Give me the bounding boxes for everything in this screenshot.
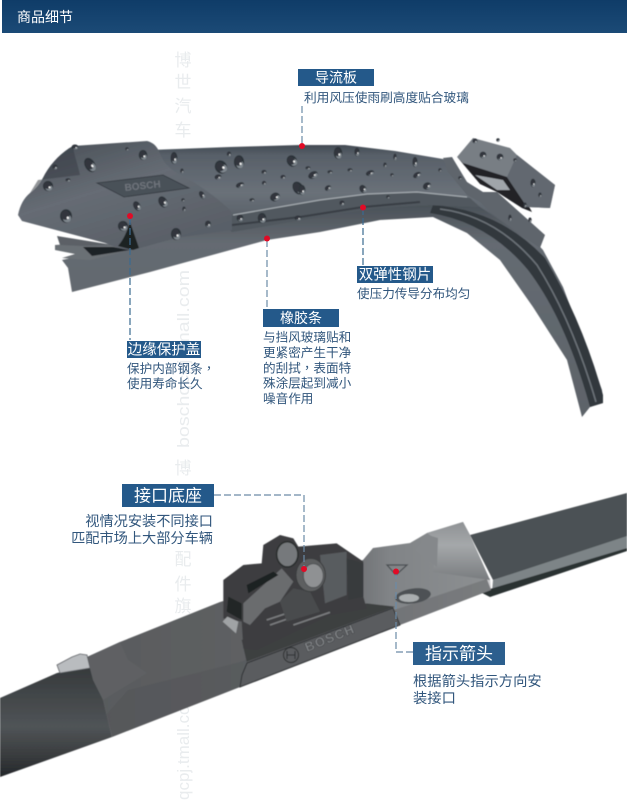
watermark [174, 51, 193, 800]
droplets [43, 138, 542, 240]
label: rubber strip [263, 309, 339, 327]
steel strip channel [232, 192, 480, 232]
end cap [18, 141, 232, 250]
text: connector description [71, 513, 213, 547]
central body [87, 522, 491, 737]
wiper blade with water droplets: BOSCH [124, 179, 161, 194]
text: indicator description [413, 672, 542, 707]
label: rubber strip: 橡胶条 [280, 310, 322, 326]
right fin [415, 535, 438, 567]
watermark: 店 [174, 643, 192, 662]
red dot: indicator arrow [393, 568, 413, 652]
watermark: 件 [174, 575, 192, 594]
text: deflector description: 利用风压使雨刷高度贴合玻璃 [304, 90, 469, 105]
base plate [240, 608, 400, 687]
blade with connector base [0, 493, 627, 777]
rubber strip [62, 200, 603, 417]
text: rubber description: 与挡风玻璃贴和 [263, 330, 351, 344]
wiper blade with water droplets [18, 138, 603, 417]
watermark: 车 [174, 121, 192, 140]
red dot: rubber strip [264, 236, 270, 309]
watermark: boschqcpj.tmall.com [174, 270, 193, 448]
red dot: deflector [299, 106, 305, 149]
BOSCH lettering: BOSCH [303, 621, 357, 655]
watermark: 旗 [174, 597, 192, 616]
label: deflector [298, 69, 374, 86]
arrow recess [394, 586, 432, 606]
watermark: qcpj.tmall.com [174, 691, 193, 800]
text: indicator description: 装接口 [413, 690, 456, 707]
logo plate on end cap [97, 175, 189, 197]
text: edge cover description: 使用寿命长久 [127, 376, 203, 391]
text: edge cover description [127, 358, 215, 391]
text: rubber description [263, 330, 352, 406]
connector [223, 535, 395, 662]
label: dual steel strip: 双弹性钢片 [359, 266, 431, 284]
watermark: 汽 [174, 97, 192, 116]
watermark: 博 [174, 459, 192, 478]
right channel [470, 493, 627, 580]
red dot: dual steel strip [360, 204, 366, 265]
mount [55, 243, 130, 260]
red dot: edge cover [127, 213, 133, 340]
watermark: 舰 [174, 620, 192, 639]
lower face shading [106, 578, 491, 737]
indicator arrow [387, 565, 407, 575]
text: rubber description: 更紧密产生干净 [263, 345, 352, 360]
watermark: 世 [174, 73, 192, 92]
text: indicator description: 根据箭头指示方向安 [413, 672, 542, 690]
watermark: 配 [174, 550, 192, 569]
right hump [427, 522, 490, 580]
heading: product details: 商品细节 [17, 9, 73, 25]
left hump [87, 642, 147, 700]
text: rubber description: 殊涂层起到减小 [263, 376, 352, 390]
label: connector base [122, 484, 214, 507]
text: dual steel description: 使压力传导分布均匀 [357, 286, 470, 301]
label: indicator arrow: 指示箭头 [425, 644, 493, 664]
text: connector description: 匹配市场上大部分车辆 [71, 530, 213, 547]
left channel [0, 665, 112, 777]
label: edge cover: 边缘保护盖 [128, 342, 200, 358]
end clip [443, 157, 545, 248]
header bar [2, 0, 627, 33]
red dot: connector base [214, 495, 307, 572]
dark tail band [430, 205, 603, 407]
text: connector description: 视情况安装不同接口 [85, 513, 213, 530]
label: indicator arrow [413, 642, 505, 665]
watermark: 博 [174, 51, 192, 70]
left clip [57, 654, 90, 673]
spoiler body [150, 145, 497, 232]
label: connector base: 接口底座 [134, 486, 202, 506]
text: edge cover description: 保护内部钢条， [127, 358, 215, 377]
text: rubber description: 噪音作用 [263, 391, 313, 406]
logo badge [284, 648, 298, 662]
label: deflector: 导流板 [315, 70, 357, 86]
text: rubber description: 的刮拭，表面特 [263, 358, 352, 376]
